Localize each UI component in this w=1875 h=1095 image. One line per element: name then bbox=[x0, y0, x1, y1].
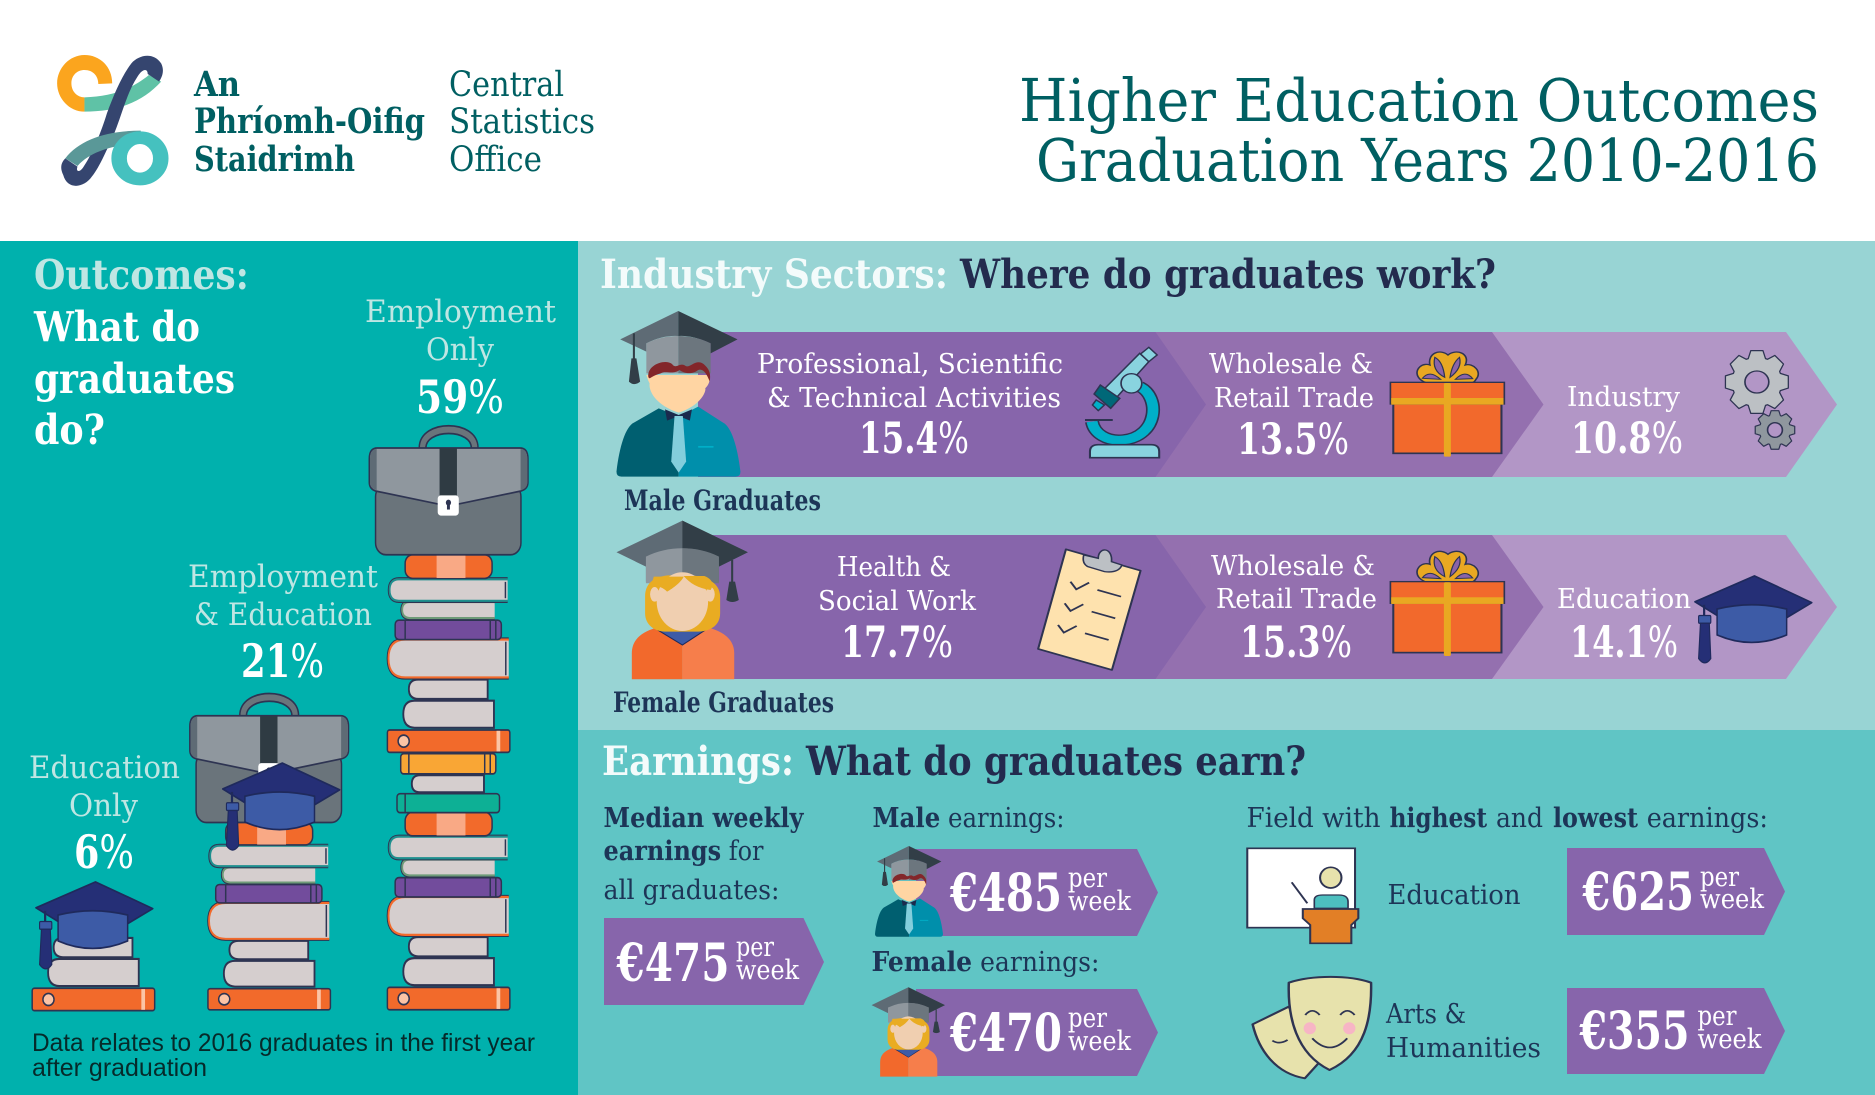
label: wholesale and retail trade 13.5%: Wholesale & bbox=[1209, 348, 1373, 380]
label: health and social work 17.7%: 17.7% bbox=[841, 618, 953, 668]
label: industry 10.8%: Industry bbox=[1567, 381, 1680, 413]
logo text: English name: Statistics bbox=[449, 102, 595, 142]
heading: earnings: What do graduates earn? bbox=[805, 738, 1306, 785]
label: industry 10.8% bbox=[1567, 381, 1683, 464]
label: health and social work 17.7%: Social Work bbox=[818, 585, 976, 617]
icon: book stack with briefcase and cap, employment and education bbox=[190, 697, 349, 1010]
label: female graduates: Female Graduates bbox=[613, 686, 834, 719]
arrow: male 485 per week: €485 bbox=[949, 863, 1062, 924]
arrow: female 470 per week: per bbox=[1068, 1003, 1107, 1034]
label: education 14.1%: 14.1% bbox=[1570, 618, 1678, 668]
label: education only 6%: 6% bbox=[74, 825, 134, 879]
arrow: 355 per week: week bbox=[1698, 1024, 1762, 1055]
arrow: median 475 per week: week bbox=[736, 955, 800, 986]
arrow: 355 per week bbox=[1567, 988, 1785, 1074]
label: wholesale and retail trade 13.5% bbox=[1209, 348, 1374, 465]
note: Data relates to 2016 graduates in the first year bbox=[32, 1029, 535, 1057]
logo text: Irish name: Staidrimh bbox=[194, 139, 355, 180]
label: professional, scientific and technical activities 15.4% bbox=[757, 348, 1063, 464]
label: education 14.1% bbox=[1557, 583, 1691, 668]
title: Higher Education Outcomes bbox=[1019, 66, 1819, 135]
label: female earnings: Female earnings: bbox=[872, 946, 1100, 978]
note bbox=[32, 1029, 535, 1082]
arrow: industry bbox=[1440, 332, 1837, 477]
label: education only 6%: Only bbox=[69, 788, 138, 824]
label: professional, scientific and technical activities 15.4%: Professional, Scientific bbox=[757, 348, 1063, 380]
icon: clipboard bbox=[1038, 549, 1141, 670]
label: employment and education 21%: & Education bbox=[194, 597, 372, 633]
arrow: 625 per week bbox=[1567, 848, 1785, 935]
arrow: 355 per week: €355 bbox=[1579, 1001, 1690, 1062]
icon: teacher at whiteboard bbox=[1247, 848, 1358, 943]
label: wholesale and retail trade 15.3%: 15.3% bbox=[1240, 618, 1352, 668]
heading: outcomes: Outcomes: bbox=[34, 251, 249, 299]
logo text: English name: Office bbox=[449, 140, 542, 180]
arrow: male 485 per week bbox=[916, 849, 1158, 936]
title bbox=[1019, 66, 1819, 195]
arrow: female 470 per week: week bbox=[1068, 1026, 1132, 1057]
logo text: Irish name bbox=[193, 64, 425, 180]
heading: outcomes: graduates bbox=[34, 355, 235, 403]
label: field with highest and lowest earnings: earnings: bbox=[1647, 802, 1768, 834]
label: education only 6%: Education bbox=[29, 750, 180, 786]
label: employment only 59%: 59% bbox=[416, 370, 504, 424]
arrow: female 470 per week bbox=[916, 989, 1158, 1076]
label: professional, scientific and technical activities 15.4%: & Technical Activities bbox=[767, 382, 1061, 414]
heading: outcomes bbox=[33, 251, 249, 454]
row: female graduates bbox=[613, 521, 1837, 719]
arrow: female 470 per week: €470 bbox=[949, 1003, 1062, 1064]
panel: earnings bbox=[578, 730, 1875, 1095]
note: after graduation bbox=[32, 1054, 207, 1082]
label: male graduates: Male Graduates bbox=[624, 484, 821, 517]
label: education: Education bbox=[1388, 879, 1520, 911]
avatar: female small bbox=[872, 987, 945, 1077]
heading: earnings bbox=[602, 738, 1306, 785]
panel: industry sectors bbox=[578, 241, 1875, 730]
icon: gears bbox=[1725, 351, 1795, 449]
text: median weekly earnings: Median weekly bbox=[604, 802, 804, 834]
logo text: Irish name: Phríomh-Oifig bbox=[194, 101, 425, 142]
label: employment and education 21%: 21% bbox=[241, 634, 324, 688]
label: field with highest and lowest earnings: highest bbox=[1390, 802, 1487, 834]
avatar: male small bbox=[875, 846, 943, 937]
arrow: median 475 per week: €475 bbox=[616, 933, 730, 994]
label: wholesale and retail trade 15.3% bbox=[1211, 550, 1377, 668]
arrow: education bbox=[1440, 535, 1837, 679]
label: field with highest and lowest earnings: Field with bbox=[1246, 802, 1380, 834]
label: arts and humanities bbox=[1385, 998, 1541, 1064]
heading: industry sectors: Where do graduates work? bbox=[959, 251, 1496, 298]
arrow: median 475 per week: per bbox=[736, 932, 774, 963]
label: employment and education 21%: Employment bbox=[188, 559, 379, 595]
text: median weekly earnings: earnings for bbox=[604, 835, 764, 867]
arrow: median 475 per week bbox=[604, 918, 824, 1005]
icon: gift bbox=[1390, 352, 1504, 457]
logo bbox=[57, 55, 595, 186]
text: median weekly earnings bbox=[604, 802, 804, 906]
avatar: female graduate bbox=[616, 521, 748, 679]
label: field with highest and lowest earnings: and bbox=[1496, 802, 1543, 834]
label: education only 6% bbox=[29, 750, 180, 879]
label: health and social work 17.7% bbox=[818, 551, 976, 668]
icon: book stack with cap, education only bbox=[32, 882, 155, 1011]
logo mark bbox=[57, 55, 163, 186]
arrow: 355 per week: per bbox=[1698, 1001, 1737, 1032]
icon: microscope bbox=[1085, 347, 1159, 458]
icon: tall book stack with briefcase, employment only bbox=[369, 430, 528, 1010]
heading: outcomes: do? bbox=[34, 406, 105, 454]
label: wholesale and retail trade 13.5%: 13.5% bbox=[1237, 415, 1349, 465]
arrow: male 485 per week: per bbox=[1068, 863, 1107, 894]
icon: theatre masks bbox=[1253, 977, 1371, 1078]
heading: earnings: Earnings: bbox=[602, 738, 794, 785]
label: industry 10.8%: 10.8% bbox=[1571, 414, 1683, 464]
label: field with highest and lowest earnings bbox=[1246, 802, 1768, 834]
label: wholesale and retail trade 15.3%: Retail Trade bbox=[1216, 583, 1377, 615]
arrow: 625 per week: €625 bbox=[1582, 862, 1694, 923]
arrow: wholesale and retail bbox=[1100, 535, 1544, 679]
heading: outcomes: What do bbox=[33, 303, 200, 351]
label: employment only 59%: Employment bbox=[365, 294, 557, 330]
logo text: English name bbox=[449, 65, 595, 180]
icon: gift bbox=[1390, 551, 1504, 656]
heading: industry sectors: Industry Sectors: bbox=[600, 251, 948, 298]
label: employment only 59%: Only bbox=[426, 332, 494, 368]
arrow: 625 per week: per bbox=[1700, 862, 1739, 893]
heading: industry sectors bbox=[600, 251, 1496, 298]
icon: graduation cap bbox=[1695, 576, 1812, 663]
avatar: male graduate bbox=[616, 311, 740, 477]
arrow: wholesale and retail bbox=[1100, 332, 1544, 477]
arrow: male 485 per week: week bbox=[1068, 886, 1132, 917]
label: male earnings: Male earnings: bbox=[872, 802, 1064, 834]
arrow: 625 per week: week bbox=[1700, 884, 1765, 915]
logo text: Irish name: An bbox=[193, 64, 240, 105]
label: arts and humanities: Arts & bbox=[1385, 998, 1466, 1030]
row: male graduates bbox=[616, 311, 1837, 517]
label: education 14.1%: Education bbox=[1557, 583, 1691, 615]
arrow: professional bbox=[698, 332, 1206, 477]
title: Graduation Years 2010-2016 bbox=[1036, 126, 1819, 195]
label: health and social work 17.7%: Health & bbox=[837, 551, 951, 583]
logo text: English name: Central bbox=[449, 65, 564, 105]
text: median weekly earnings: all graduates: bbox=[604, 874, 780, 906]
header background bbox=[0, 0, 1875, 241]
label: employment and education 21% bbox=[188, 559, 379, 688]
label: arts and humanities: Humanities bbox=[1386, 1032, 1541, 1064]
label: wholesale and retail trade 13.5%: Retail Trade bbox=[1214, 382, 1374, 414]
label: employment only 59% bbox=[365, 294, 557, 424]
label: wholesale and retail trade 15.3%: Wholesale & bbox=[1211, 550, 1375, 582]
arrow: health bbox=[700, 535, 1206, 679]
label: field with highest and lowest earnings: lowest bbox=[1553, 802, 1638, 834]
label: professional, scientific and technical activities 15.4%: 15.4% bbox=[859, 414, 969, 464]
panel: outcomes bbox=[0, 241, 578, 1095]
